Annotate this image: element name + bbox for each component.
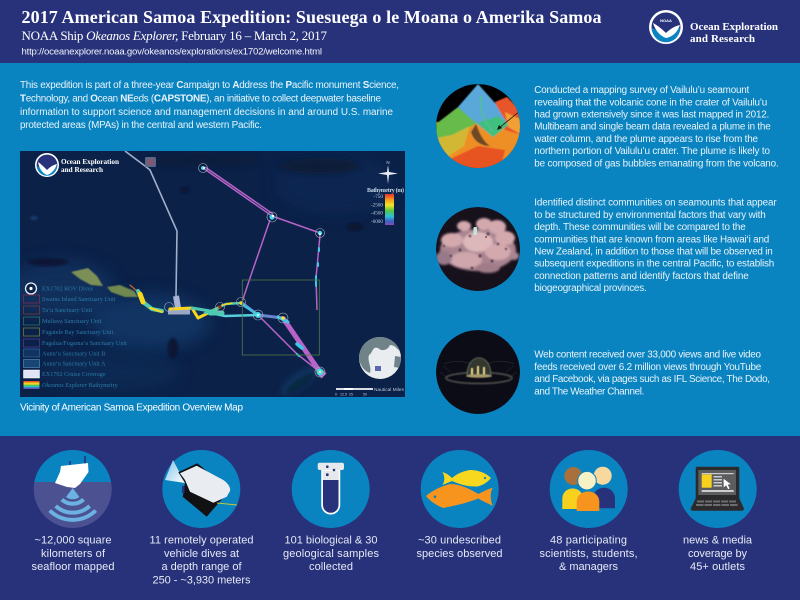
map legend: Swains Island Sanctuary Unit <box>42 296 116 303</box>
title: 2017 American Samoa Expedition: Suesuega o le Moana o Amerika Samoa <box>22 7 602 27</box>
stat: participants: scientists, students, <box>540 548 638 560</box>
text: web content reach: Web content received over 33,000 views and live video <box>534 350 762 361</box>
header panel <box>0 0 800 63</box>
text: seamount communities: subsequent expeditions in the central Pacific, to establish <box>534 259 774 270</box>
text: Vailulu'u survey: be composed of gas bubbles emanating from the volcano. <box>534 158 779 169</box>
logo text: Ocean Exploration and Research: Ocean Exploration <box>690 21 778 33</box>
intro text block: This expedition is part of a three-year Campaign to Address the Pacific monument Science, <box>20 80 399 91</box>
map legend: Aunu‘u Sanctuary Unit B <box>42 350 105 358</box>
photo: deep-sea coral <box>436 207 520 291</box>
intro text block: protected areas (MPAs) in the central and western Pacific. <box>20 120 262 131</box>
stat: undescribed species: species observed <box>416 548 502 560</box>
logo: NOAA seal: NOAA <box>660 18 672 23</box>
map legend: EX1702 ROV Dives <box>42 286 94 292</box>
stat: media coverage: coverage by <box>688 548 748 560</box>
bathymetry legend: Bathymetry (m) <box>367 187 404 194</box>
cruise track: transit <box>125 151 190 312</box>
text: web content reach: and The Weather Channel. <box>534 386 644 397</box>
port marker <box>145 157 156 167</box>
url: http://oceanexplorer.noaa.gov/okeanos/explorations/ex1702/welcome.html <box>22 46 322 58</box>
stat: participants: & managers <box>559 561 618 573</box>
icon: two fish <box>421 450 499 528</box>
stat: ROV dives: 11 remotely operated <box>150 534 254 546</box>
map logo <box>35 153 119 177</box>
logo text: Ocean Exploration and Research: and Research <box>690 33 755 45</box>
subtitle: NOAA Ship Okeanos Explorer, February 16 – March 2, 2017 <box>22 28 328 43</box>
stat: ROV dives: a depth range of <box>162 561 242 573</box>
locator globe <box>359 337 402 379</box>
bathymetry legend: -750 <box>373 194 383 200</box>
map logo: Ocean Exploration <box>61 158 119 166</box>
bathymetry legend <box>367 187 404 225</box>
ROV dive sites <box>164 164 325 377</box>
compass: N <box>386 160 390 165</box>
stat: ROV dives: 250 - ~3,930 meters <box>152 574 251 586</box>
text: web content reach <box>534 350 770 397</box>
stat: seafloor mapped: seafloor mapped <box>32 561 114 573</box>
stat: participants <box>540 450 638 573</box>
text: seamount communities <box>534 198 777 294</box>
bathymetry legend: -2500 <box>371 202 383 208</box>
bathymetry legend: -6000 <box>371 219 383 225</box>
intro text block <box>20 80 399 131</box>
stat: undescribed species <box>416 450 502 560</box>
text: seamount communities: New Zealand, in addition to those that will be observed in <box>534 246 773 258</box>
text: seamount communities: Identified distinct communities on seamounts that appear <box>534 198 777 209</box>
stat: seafloor mapped: ~12,000 square <box>34 534 112 546</box>
icon: laptop <box>679 450 757 528</box>
stat: media coverage <box>679 450 757 573</box>
photo: jellyfish <box>436 330 520 414</box>
stat: samples: 101 biological & 30 <box>284 534 378 546</box>
bottom stats panel <box>0 436 800 600</box>
map legend: Muliava Sanctuary Unit <box>42 318 102 325</box>
stat: undescribed species: ~30 undescribed <box>418 534 501 546</box>
map legend <box>24 283 127 389</box>
stat: samples: geological samples <box>283 548 380 560</box>
map legend: Aunu‘u Sanctuary Unit A <box>42 360 106 368</box>
map legend: Fagalua/Fogama‘a Sanctuary Unit <box>42 340 127 347</box>
study area rectangle <box>242 280 319 355</box>
icon: test tube <box>292 450 370 528</box>
text: web content reach: and Facebook, via pages such as IFL Science, The Dodo, <box>534 374 770 385</box>
intro text block: information to support science and management decisions in and around U.S. marine <box>20 107 394 118</box>
text: web content reach: feeds received over 6.2 million views through YouTube <box>534 362 762 373</box>
stat: participants: 48 participating <box>550 534 627 546</box>
text: seamount communities: connection patterns and identify factors that define <box>534 271 749 282</box>
scale bar <box>335 388 404 396</box>
bathymetry legend: -4500 <box>371 210 383 216</box>
stat: samples <box>283 450 380 573</box>
logo: NOAA seal <box>649 10 683 44</box>
map legend: Okeanos Explorer Bathymetry <box>42 382 119 389</box>
stat: seafloor mapped <box>32 450 114 572</box>
text: seamount communities: to be structured by environmental factors that vary with <box>534 210 766 221</box>
stat: seafloor mapped: kilometers of <box>41 548 106 560</box>
text: Vailulu'u survey: northern portion of Vailulu’u crater. The plume is likely to <box>534 146 770 157</box>
text: Vailulu'u survey: Multibeam and single beam data revealed a plume in the <box>534 122 771 133</box>
map: expedition overview <box>5 151 405 400</box>
cruise track: coloured swath near islands <box>130 248 319 356</box>
scale bar: 0 12.5 25 50 <box>335 392 367 396</box>
icon: remotely operated vehicle <box>162 450 240 528</box>
text: seamount communities: depth. These communities will be compared to the <box>534 222 746 233</box>
stat: media coverage: 45+ outlets <box>690 561 746 573</box>
icon: three people <box>550 450 628 528</box>
compass <box>378 160 398 184</box>
text: Vailulu'u survey: water column, and the plume appears to rise from the <box>533 134 758 145</box>
text: seamount communities: biogeographical provinces. <box>534 283 647 294</box>
cruise track: magenta bathymetry swaths <box>203 167 324 376</box>
islands <box>71 268 138 297</box>
icon: ship and sonar <box>34 450 112 528</box>
seafloor shading <box>5 152 395 400</box>
text: Vailulu'u survey <box>533 85 779 169</box>
plume arrow <box>500 112 518 127</box>
text: seamount communities: communities that are known from areas like Hawai‘i and <box>534 234 769 245</box>
stat: media coverage: news & media <box>683 534 753 546</box>
map legend: Ta‘u Sanctuary Unit <box>42 307 92 314</box>
map legend: Fagatele Bay Sanctuary Unit <box>42 329 114 336</box>
photo: multibeam image of Vailulu'u <box>436 84 522 170</box>
map legend: EX1702 Cruise Coverage <box>42 371 106 378</box>
logo text: Ocean Exploration and Research <box>690 21 778 45</box>
text: Vailulu'u survey: Conducted a mapping survey of Vailulu’u seamount <box>534 85 750 96</box>
stat: samples: collected <box>309 561 353 573</box>
stat: ROV dives: vehicle dives at <box>164 548 239 560</box>
intro text block: Technology, and Ocean NEeds (CAPSTONE), an initiative to collect deepwater baseline <box>20 94 382 104</box>
text: Vailulu'u survey: revealing that the volcanic cone in the crater of Vailulu’u <box>534 97 767 108</box>
stat: ROV dives <box>150 450 254 586</box>
map logo: and Research <box>61 166 103 174</box>
text: Vailulu'u survey: had grown extensively since it was last mapped in 2012. <box>534 110 769 120</box>
map caption: Vicinity of American Samoa Expedition Overview Map <box>20 402 243 414</box>
scale bar: Nautical Miles <box>374 387 404 393</box>
